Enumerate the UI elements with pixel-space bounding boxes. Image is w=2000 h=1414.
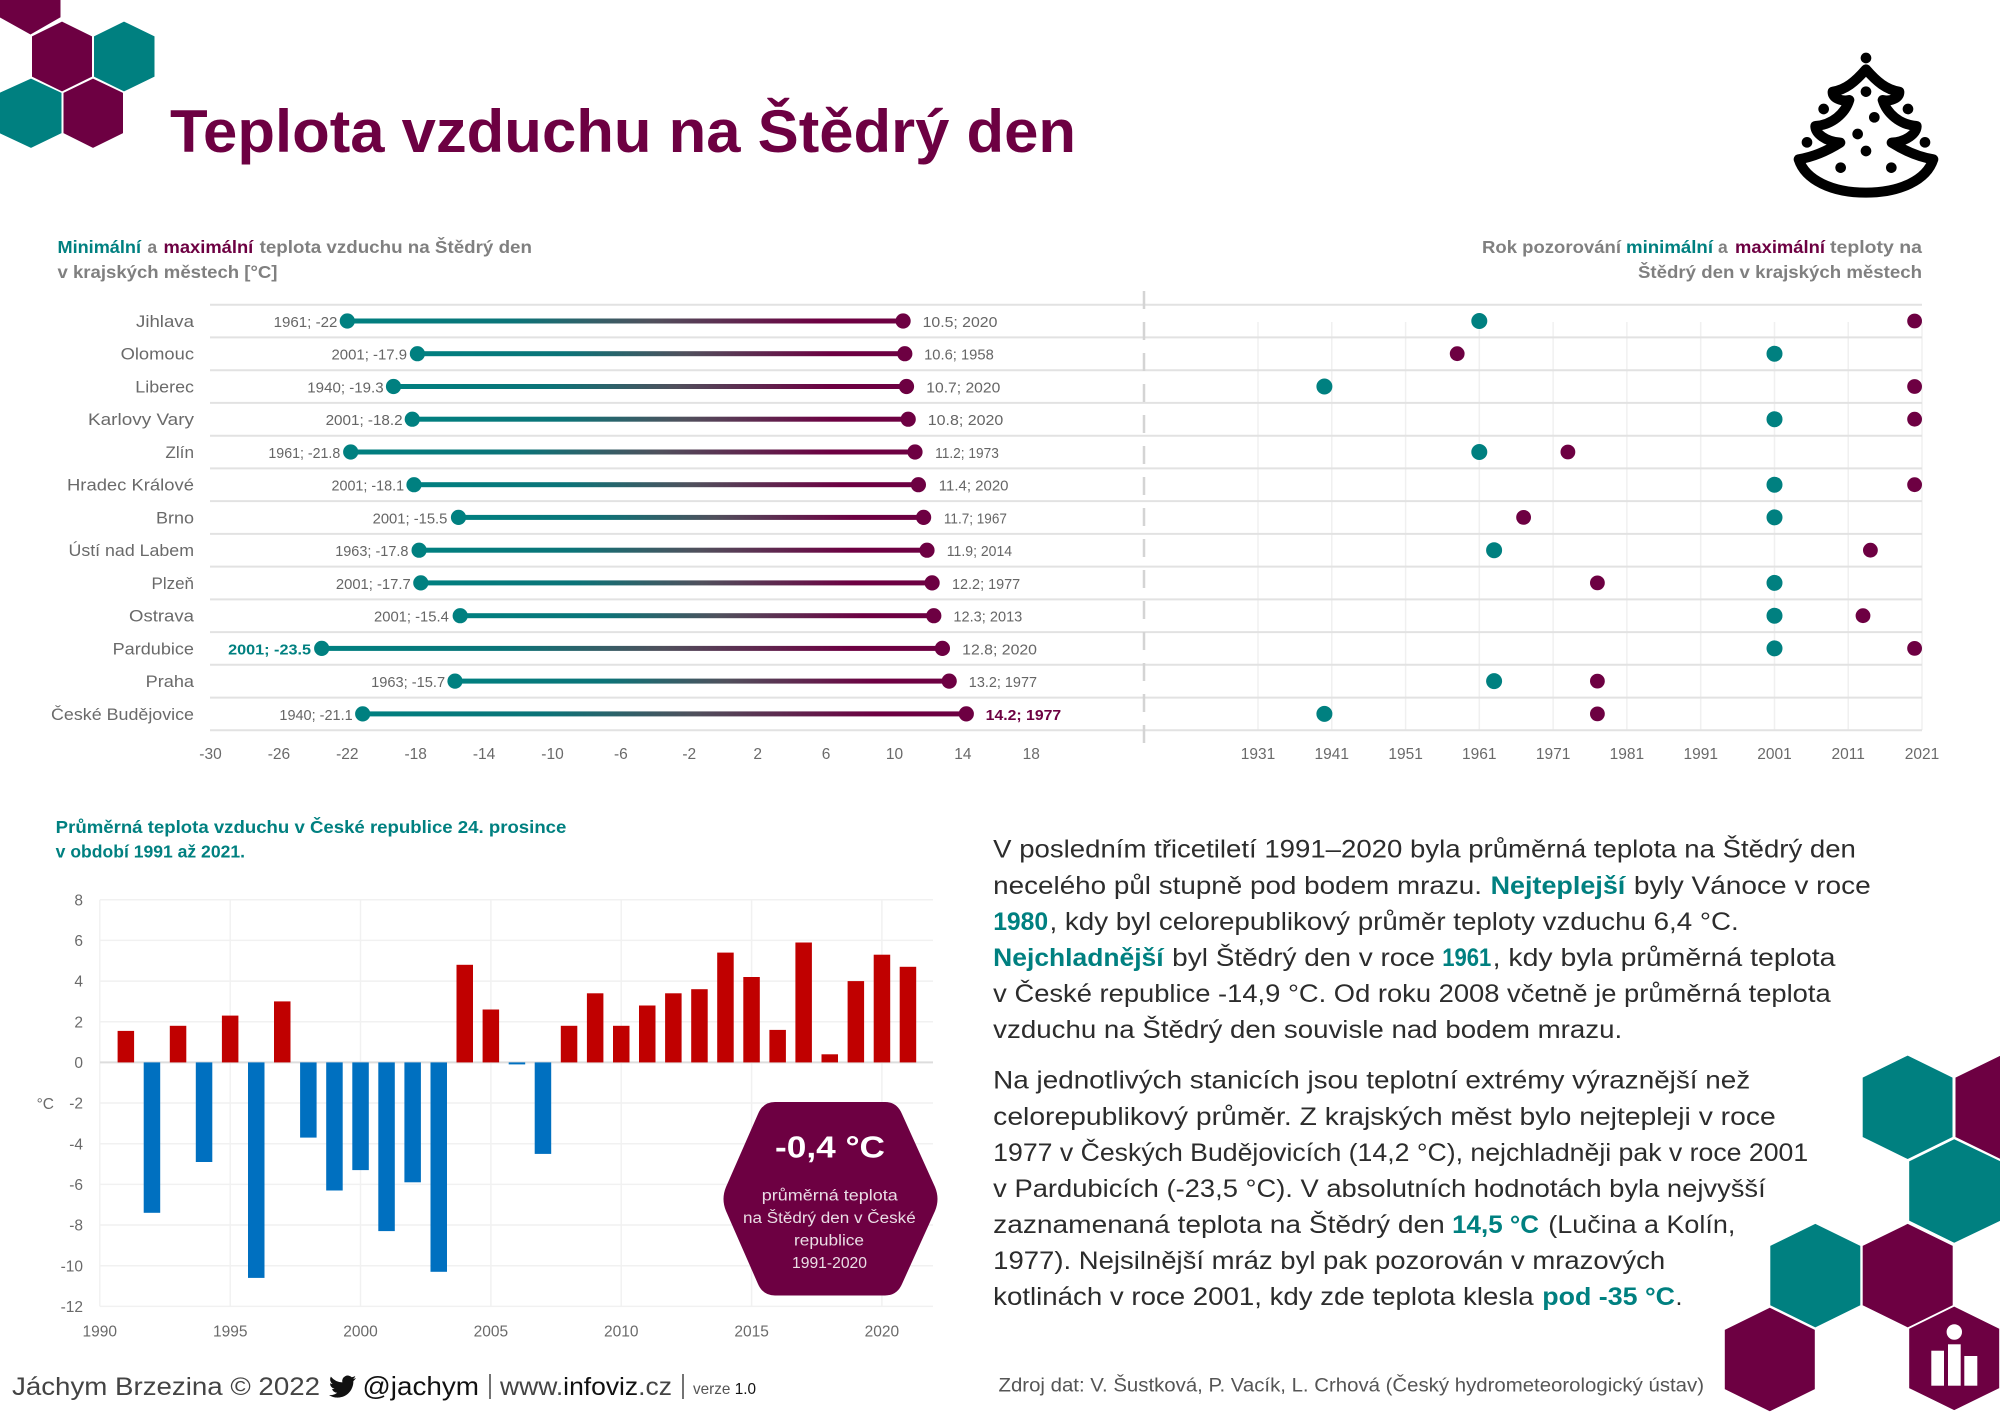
city labels: Olomouc — [121, 346, 194, 364]
dumbbell chart: min and max temperature by city — [51, 313, 1061, 763]
text block: first paragraph: Nejchladnější — [993, 944, 1165, 972]
temperature axis: 18 — [1023, 746, 1040, 763]
year axis: 2021 — [1905, 746, 1939, 763]
temperature axis: 6 — [822, 746, 830, 763]
maximum value labels: 12.3; 2013 — [953, 609, 1022, 626]
warm years bars — [118, 942, 916, 1062]
maximum value labels: 11.4; 2020 — [939, 478, 1008, 495]
city labels: Karlovy Vary — [88, 411, 195, 429]
footer: author and links — [12, 1371, 756, 1401]
x axis labels: 2000 — [343, 1324, 378, 1341]
minimum value labels: 2001; -17.7 — [336, 576, 411, 593]
x axis labels: 1990 — [83, 1324, 117, 1341]
y axis labels: -8 — [69, 1218, 83, 1235]
text block: second paragraph: . — [1676, 1283, 1682, 1311]
heading: observation year chart: a — [1718, 237, 1728, 257]
text block: second paragraph: v Pardubicích (-23,5 °C). V absolutních hodnotách byla nejvyšší — [993, 1175, 1766, 1203]
temperature axis: -10 — [541, 746, 564, 763]
minimum dots — [314, 313, 468, 722]
y axis labels: -2 — [69, 1096, 83, 1113]
text block: second paragraph: celorepublikový průměr. Z krajských měst bylo nejtepleji v roce — [993, 1103, 1776, 1131]
heading: observation year chart — [1482, 237, 1922, 282]
year axis: 1931 — [1241, 746, 1275, 763]
city labels: České Budějovice — [51, 705, 194, 724]
cold years bars — [144, 1062, 551, 1278]
text block: second paragraph: kotlinách v roce 2001, kdy zde teplota klesla — [993, 1283, 1534, 1311]
city labels: Jihlava — [136, 313, 195, 331]
text block: first paragraph: v České republice -14,9 °C. Od roku 2008 včetně je průměrná teplota — [993, 979, 1831, 1008]
city labels: Brno — [156, 509, 194, 527]
bar chart: average temperature 1991-2021 — [37, 892, 933, 1341]
minimum value labels: 2001; -18.2 — [326, 412, 403, 429]
heading: average temperature chart — [56, 816, 567, 862]
minimum value labels — [228, 314, 449, 724]
minimum value labels: 1940; -19.3 — [307, 380, 384, 396]
heading: observation year chart: Štědrý den v krajských městech — [1638, 261, 1922, 282]
year axis: 1991 — [1683, 746, 1718, 763]
text block: first paragraph: byl Štědrý den v roce — [1172, 943, 1435, 972]
text block: second paragraph: (Lučina a Kolín, — [1548, 1211, 1735, 1239]
heading: average temperature chart: v období 1991 až 2021. — [56, 842, 245, 862]
year axis: 1961 — [1462, 746, 1497, 763]
footer: author and links: verze 1.0 — [693, 1381, 756, 1398]
minimum value labels: 1961; -21.8 — [268, 445, 340, 462]
maximum value labels: 11.2; 1973 — [935, 445, 999, 462]
y axis labels: 6 — [74, 933, 83, 950]
heading: minimum and maximum temperature chart: teplota vzduchu na Štědrý den — [260, 236, 532, 257]
temperature axis: 14 — [954, 746, 972, 763]
heading: minimum and maximum temperature chart: Minimální — [58, 237, 142, 257]
heading: observation year chart: Rok pozorování — [1482, 237, 1622, 257]
year axis — [1241, 746, 1939, 763]
minimum value labels: 1963; -15.7 — [371, 674, 445, 691]
minimum value labels: 2001; -23.5 — [228, 641, 311, 658]
x axis labels: 2020 — [865, 1324, 900, 1341]
text block: second paragraph — [993, 1067, 1808, 1311]
city labels: Pardubice — [113, 640, 194, 658]
footer: author and links: www.infoviz.cz — [499, 1373, 672, 1401]
temperature axis: -22 — [336, 746, 359, 763]
callout: average temperature badge — [724, 1102, 938, 1296]
footer: author and links: Jáchym Brzezina © 2022 — [12, 1373, 320, 1401]
year axis: 1981 — [1610, 746, 1644, 763]
heading: minimum and maximum temperature chart: maximální — [164, 237, 254, 257]
maximum year dots — [1450, 314, 1922, 721]
hexagon cluster: bottom right — [1724, 1055, 2000, 1412]
temperature axis: -26 — [268, 746, 290, 763]
year axis: 2001 — [1757, 746, 1792, 763]
maximum value labels: 10.5; 2020 — [923, 314, 997, 331]
y axis labels: -10 — [61, 1258, 83, 1275]
text block: first paragraph: , kdy byl celorepublikový průměr teploty vzduchu 6,4 °C. — [1050, 908, 1739, 936]
dot chart: year of minimum and maximum by city — [1241, 313, 1939, 763]
heading: minimum and maximum temperature chart — [58, 236, 532, 282]
temperature axis: -30 — [199, 746, 222, 763]
temperature axis: -6 — [614, 746, 628, 763]
minimum value labels: 1940; -21.1 — [279, 707, 353, 724]
minimum value labels: 2001; -18.1 — [332, 478, 404, 495]
maximum value labels: 11.7; 1967 — [944, 510, 1007, 527]
callout: average temperature badge: na Štědrý den v České — [743, 1210, 916, 1227]
heading: observation year chart: minimální — [1626, 237, 1714, 257]
heading: observation year chart: maximální — [1735, 237, 1826, 257]
text block: first paragraph — [993, 835, 1871, 1044]
year axis: 2011 — [1832, 746, 1865, 763]
maximum value labels: 12.2; 1977 — [952, 576, 1020, 593]
x axis labels: 2015 — [734, 1324, 769, 1341]
y axis labels: 4 — [74, 974, 83, 991]
maximum value labels: 10.6; 1958 — [924, 347, 994, 364]
city labels — [51, 313, 195, 724]
y axis labels: -12 — [61, 1299, 83, 1316]
icon: twitter bird — [329, 1376, 356, 1398]
maximum value labels: 10.7; 2020 — [926, 380, 1000, 396]
title: Teplota vzduchu na Štědrý den — [170, 98, 1076, 165]
text block: second paragraph: 1977). Nejsilnější mráz byl pak pozorován v mrazových — [993, 1247, 1665, 1275]
year axis: 1941 — [1315, 746, 1349, 763]
chart grid and row separators — [210, 291, 1922, 747]
heading: minimum and maximum temperature chart: v krajských městech [°C] — [58, 262, 278, 282]
y axis labels: 0 — [74, 1055, 83, 1072]
text block: second paragraph: 1977 v Českých Budějovicích (14,2 °C), nejchladněji pak v roce 2001 — [993, 1138, 1808, 1167]
icon: christmas tree — [1799, 53, 1933, 193]
text block: first paragraph: vzduchu na Štědrý den souvisle nad bodem mrazu. — [993, 1015, 1622, 1044]
text block: first paragraph: byly Vánoce v roce — [1634, 872, 1871, 900]
temperature axis: 2 — [753, 746, 762, 763]
text block: second paragraph: pod -35 °C — [1542, 1283, 1675, 1311]
maximum value labels — [923, 314, 1061, 724]
footer: author and links: @jachym — [362, 1371, 479, 1401]
city labels: Praha — [146, 673, 195, 691]
maximum value labels: 14.2; 1977 — [986, 707, 1061, 724]
x axis labels: 1995 — [213, 1324, 247, 1341]
text block: first paragraph: necelého půl stupně pod bodem mrazu. — [993, 872, 1482, 900]
hexagon cluster: top left — [0, 0, 155, 148]
y axis labels: 8 — [74, 892, 83, 910]
minimum value labels: 1963; -17.8 — [335, 543, 408, 560]
city labels: Hradec Králové — [67, 477, 194, 495]
maximum dots — [896, 313, 974, 722]
text block: second paragraph: Na jednotlivých stanicích jsou teplotní extrémy výraznější než — [993, 1067, 1750, 1095]
text block: second paragraph: 14,5 °C — [1452, 1211, 1539, 1239]
year axis: 1951 — [1388, 746, 1423, 763]
text block: first paragraph: 1980 — [993, 908, 1048, 936]
maximum value labels: 11.9; 2014 — [947, 543, 1012, 560]
text block: second paragraph: zaznamenaná teplota na Štědrý den — [993, 1210, 1445, 1239]
icon: infoviz logo — [1931, 1324, 1977, 1386]
temperature axis: 10 — [886, 746, 903, 763]
temperature axis: -18 — [404, 746, 427, 763]
x axis labels: 2005 — [474, 1324, 508, 1341]
minimum year dots — [1316, 313, 1782, 722]
city labels: Zlín — [165, 444, 194, 462]
city labels: Ústí nad Labem — [68, 541, 194, 560]
heading: minimum and maximum temperature chart: a — [147, 237, 157, 257]
text block: first paragraph: 1961 — [1442, 944, 1491, 972]
temperature axis: -14 — [473, 746, 496, 763]
minimum value labels: 1961; -22 — [274, 314, 337, 331]
y axis labels: -4 — [69, 1136, 83, 1153]
text block: first paragraph: , kdy byla průměrná teplota — [1493, 944, 1836, 972]
source note: Zdroj dat: V. Šustková, P. Vacík, L. Crhová (Český hydrometeorologický ústav) — [998, 1374, 1704, 1396]
city labels: Ostrava — [129, 608, 195, 626]
text block: first paragraph: V posledním třicetiletí 1991–2020 byla průměrná teplota na Štědrý den — [993, 835, 1856, 864]
year axis: 1971 — [1536, 746, 1570, 763]
text block: first paragraph: Nejteplejší — [1491, 872, 1626, 900]
callout: average temperature badge: -0,4 °C — [775, 1130, 885, 1165]
y axis labels — [37, 892, 83, 1316]
range bars — [322, 318, 966, 716]
callout: average temperature badge: 1991-2020 — [792, 1255, 867, 1272]
x axis labels — [83, 1324, 900, 1341]
city labels: Liberec — [135, 378, 194, 396]
temperature axis — [199, 746, 1040, 763]
maximum value labels: 12.8; 2020 — [962, 641, 1037, 658]
heading: observation year chart: teploty na — [1830, 237, 1922, 257]
minimum value labels: 2001; -15.5 — [373, 510, 447, 527]
y axis labels: °C — [37, 1096, 54, 1113]
x axis labels: 2010 — [604, 1324, 639, 1341]
heading: average temperature chart: Průměrná teplota vzduchu v České republice 24. prosince — [56, 816, 567, 837]
minimum value labels: 2001; -15.4 — [374, 609, 449, 626]
minimum value labels: 2001; -17.9 — [332, 347, 407, 364]
maximum value labels: 13.2; 1977 — [969, 674, 1037, 691]
callout: average temperature badge: průměrná teplota — [762, 1187, 898, 1204]
maximum value labels: 10.8; 2020 — [928, 412, 1003, 429]
temperature axis: -2 — [682, 746, 696, 763]
y axis labels: 2 — [74, 1014, 83, 1031]
y axis labels: -6 — [69, 1177, 83, 1194]
callout: average temperature badge: republice — [794, 1233, 864, 1250]
city labels: Plzeň — [152, 575, 194, 593]
